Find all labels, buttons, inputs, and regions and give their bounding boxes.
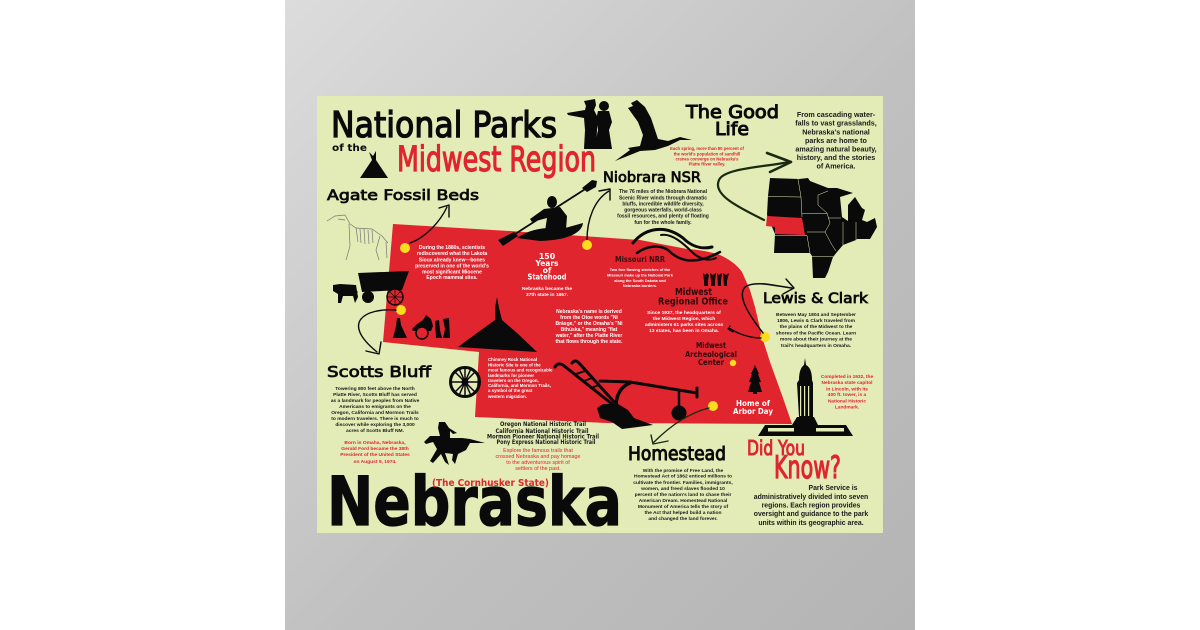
text: Niobrara: The 76 miles of the Niobrara National — [619, 189, 708, 195]
icon: plow — [555, 361, 697, 429]
text: Agate fossil: Epoch mammal sites. — [426, 275, 478, 281]
text: Agate fossil — [415, 245, 489, 281]
text: Archeological Center: Center — [698, 358, 724, 367]
text: Homestead — [633, 468, 733, 522]
text: Homestead: American Dream. Homestead National — [639, 498, 728, 504]
text: Midwest Regional Office — [645, 287, 728, 334]
text: Homestead: Monument of America tells the story of — [638, 504, 729, 510]
icon: fossil skeleton — [327, 215, 388, 260]
text: Midwest Regional Office: Midwest — [675, 287, 712, 298]
heading: Did You Know: Know? — [774, 450, 841, 486]
text: intro: Nebraska's national — [802, 128, 870, 136]
text: Gerald Ford: Born in Omaha, Nebraska, — [344, 440, 406, 446]
text: intro: parks are home to — [805, 136, 868, 145]
text: historic trails: Oregon National Historic Trail — [500, 420, 586, 428]
text: Chimney Rock: landmarks for pioneer — [488, 373, 534, 378]
heading: Agate Fossil Beds: Agate Fossil Beds — [327, 188, 479, 204]
text: Homestead: women, and freed slaves flooded 10 — [640, 486, 725, 492]
icon: Chimney Rock — [458, 297, 537, 352]
text: Gerald Ford: on August 9, 1974. — [353, 459, 397, 465]
arrow: Scotts Bluff — [359, 310, 396, 354]
text: intro: of America. — [817, 162, 855, 170]
midwest states map — [766, 178, 877, 278]
text: Lewis and Clark: the plains of the Midwest to the — [780, 324, 853, 330]
text: Chimney Rock: Chimney Rock National — [488, 357, 537, 362]
text: Did You Know: Park Service is — [808, 485, 858, 492]
icon: explorers pointing — [567, 99, 612, 149]
text: trails description: crossed Nebraska and pay homage — [495, 454, 581, 460]
text: Archeological Center: Archeological — [685, 350, 737, 359]
text: Missouri NRR: along the South Dakota and — [614, 278, 666, 283]
text: Home of Arbor Day: Arbor Day — [733, 407, 773, 416]
text: capitol fact: 400 ft. tower, is a — [828, 392, 867, 398]
text: Homestead: the Act that helped build a nation — [645, 510, 722, 516]
text: name origin — [555, 309, 623, 345]
text: historic trails — [487, 420, 599, 446]
text: crane fact: Each spring, more than 80 percent of — [670, 146, 744, 151]
text: Missouri NRR: Missouri NRR — [615, 255, 665, 264]
text: Did You Know: units within its geographic area. — [758, 520, 864, 527]
heading: The Good Life: The Good — [685, 102, 779, 123]
text: Gerald Ford: President of the United States — [340, 452, 410, 458]
text: Did You Know: oversight and guidance to the park — [754, 511, 868, 518]
text: crane fact: cranes converge on Nebraska's — [676, 156, 739, 162]
text: name origin: from the Otoe words "Ni — [560, 315, 618, 321]
heading: Lewis and Clark: Lewis & Clark — [763, 291, 869, 307]
arrow: Agate — [410, 205, 449, 243]
text: crane fact: Platte River valley. — [689, 162, 725, 166]
text: Niobrara: fossil resources, and plenty of floating — [617, 214, 709, 220]
text: Missouri NRR: Two free flowing stretches of the — [610, 267, 671, 272]
icon: kayaker — [498, 180, 597, 246]
text: intro: From cascading water- — [797, 110, 876, 119]
text: statehood: 37th state in 1867. — [526, 292, 569, 298]
icon: pony express rider — [424, 422, 485, 465]
text: Niobrara: bluffs, incredible wildlife diversity, — [622, 202, 704, 208]
heading: Did You Know — [747, 436, 841, 486]
text: historic trails: Pony Express National Historic Trail — [496, 438, 596, 446]
icon: Missouri river swirls — [633, 229, 720, 261]
text: trails description — [495, 448, 581, 472]
text: trails description: to the adventurous spirit of — [506, 460, 570, 466]
text: Niobrara: Scenic River winds through dramatic — [619, 196, 707, 202]
Nebraska state map — [383, 224, 792, 424]
title: of the — [332, 143, 367, 154]
text: Did You Know: regions. Each region provides — [762, 502, 861, 510]
icon: people silhouettes — [703, 273, 729, 286]
heading: Did You Know: Did You — [747, 436, 805, 460]
text: Chimney Rock: California, and Mormon Trails, — [488, 383, 551, 388]
text: intro: falls to vast grasslands, — [795, 118, 877, 128]
text: statehood: Statehood — [528, 272, 566, 282]
heading: Niobrara NSR: Niobrara NSR — [603, 170, 701, 186]
text: Did You Know — [754, 485, 868, 527]
text: historic trails: California National Historic Trail — [496, 427, 588, 435]
text: Midwest Regional Office: administers 61 parks sites across — [645, 322, 723, 328]
text: capitol fact: Nebraska state capitol — [822, 380, 872, 386]
arrow: Lewis and Clark — [728, 279, 794, 338]
icon: teepee — [360, 151, 388, 178]
text: Missouri NRR: Nebraska borders. — [623, 283, 657, 288]
text: Scotts Bluff: Towering 800 feet above the North — [335, 386, 415, 392]
text: statehood: 150 — [539, 252, 556, 261]
text: Gerald Ford — [340, 440, 410, 465]
text: Chimney Rock: Historic Site is one of the — [488, 362, 541, 368]
text: capitol fact — [821, 374, 873, 410]
text: intro: history, and the stories — [797, 153, 875, 162]
arrow: Homestead — [651, 408, 709, 444]
text: Scotts Bluff: as a landmark for peoples from Native — [331, 398, 420, 404]
text: capitol fact: in Lincoln, with its — [826, 386, 868, 392]
text: Lewis and Clark: Between May 1804 and September — [776, 312, 856, 318]
text: Lewis and Clark — [776, 312, 856, 349]
title — [331, 105, 596, 180]
text: Scotts Bluff: to modern travelers. There is much to — [331, 416, 419, 422]
text: Scotts Bluff: Oregon, California and Mormon Trails — [331, 410, 419, 416]
text: Did You Know: administratively divided into seven — [754, 494, 868, 501]
text: name origin: Bthúska," meaning "flat — [561, 327, 618, 333]
text: Scotts Bluff — [331, 386, 420, 434]
text: Home of Arbor Day — [733, 399, 773, 416]
text: historic trails: Mormon Pioneer National Historic Trail — [487, 432, 599, 440]
text: Midwest Regional Office: Since 1937, the headquarters of — [647, 310, 721, 316]
icon: pine tree — [748, 365, 762, 394]
text: Agate fossil: During the 1880s, scientists — [419, 245, 485, 251]
text: Scotts Bluff: acres of Scotts Bluff NM. — [346, 428, 405, 434]
text: Chimney Rock — [487, 357, 553, 399]
text: Agate fossil: rediscovered what the Lakota — [417, 251, 487, 257]
text: intro: amazing natural beauty, — [795, 144, 877, 154]
icon: state capitol — [758, 358, 853, 436]
text: Homestead: percent of the nation's land to chase their — [635, 492, 731, 498]
text: Niobrara — [617, 189, 709, 226]
text: statehood — [522, 252, 572, 298]
text: capitol fact: Landmark. — [835, 404, 859, 410]
text: Lewis and Clark: shores of the Pacific Ocean. Learn — [776, 330, 856, 336]
text: statehood: Nebraska became the — [522, 286, 572, 292]
text: Missouri NRR — [607, 255, 674, 288]
text: Agate fossil: preserved in one of the world's — [415, 264, 489, 270]
text: trails description: Explore the famous trails that — [503, 448, 573, 454]
heading: The Good Life: Life — [715, 119, 749, 140]
text: Archeological Center: Midwest — [696, 341, 726, 350]
text: intro — [795, 110, 877, 170]
text: Archeological Center — [685, 341, 737, 367]
icon: sandhill crane — [615, 100, 692, 161]
text: Scotts Bluff: discover while exploring the 3,000 — [335, 422, 415, 428]
text: Agate fossil: most significant Miocene — [422, 270, 482, 276]
arrow: good life to map — [718, 153, 791, 220]
text: Niobrara: gorgeous waterfalls, world-class — [624, 208, 702, 214]
text: Homestead: and changed the land forever. — [648, 516, 718, 522]
text: Chimney Rock: most famous and recognizable — [488, 368, 553, 372]
text: Scotts Bluff: Platte River, Scotts Bluff has served — [333, 392, 417, 398]
text: Lewis and Clark: more about their journey at the — [780, 336, 852, 342]
text: Chimney Rock: a symbol of the great — [488, 388, 533, 393]
text: Midwest Regional Office: the Midwest Region, which — [653, 316, 715, 322]
text: name origin: water," after the Platte River — [555, 333, 622, 339]
text: capitol fact: National Historic — [828, 398, 866, 404]
heading: Nebraska: Nebraska — [327, 463, 622, 542]
icon: ox and covered wagon — [333, 271, 409, 305]
text: Gerald Ford: Gerald Ford became the 38th — [341, 446, 409, 452]
text: Homestead: Homestead Act of 1862 enticed millions to — [634, 474, 732, 480]
text: crane fact — [670, 146, 744, 166]
text: Niobrara: fun for the whole family. — [634, 220, 692, 226]
text: Chimney Rock: travelers on the Oregon, — [488, 378, 539, 383]
title: National Parks — [331, 105, 557, 146]
text: Lewis and Clark: trail's headquarters in Omaha. — [781, 343, 852, 349]
text: Midwest Regional Office: Regional Office — [658, 296, 728, 308]
text: statehood: Years — [535, 259, 559, 268]
text: capitol fact: Completed in 1932, the — [821, 374, 873, 380]
text: crane fact: the world's population of sandhill — [674, 152, 740, 156]
icon: yellow map markers — [396, 240, 770, 411]
text: Midwest Regional Office: 13 states, has been in Omaha. — [649, 328, 720, 334]
text: name origin: Brásge," or the Omaha's "Ni — [555, 321, 623, 327]
heading: The Good Life — [685, 102, 779, 140]
icon: wagon wheel — [450, 367, 480, 397]
icon: stagecoach group — [393, 315, 450, 339]
text: trails description: settlers of the past. — [515, 466, 561, 472]
subtitle: The Cornhusker State: (The Cornhusker State) — [432, 478, 549, 489]
arrow: Niobrara — [587, 189, 610, 240]
text: Homestead: cultivate the frontier. Families, immigrants, — [633, 480, 733, 486]
heading: Scotts Bluff: Scotts Bluff — [327, 363, 432, 381]
title: Midwest Region — [397, 140, 596, 180]
text: Home of Arbor Day: Home of — [736, 399, 771, 408]
text: Lewis and Clark: 1806, Lewis & Clark traveled from — [777, 318, 856, 324]
text: name origin: Nebraska's name is derived — [556, 309, 622, 315]
heading: Homestead: Homestead — [628, 443, 726, 465]
text: Homestead: With the promise of Free Land, the — [643, 468, 723, 474]
text: statehood: of — [543, 266, 552, 275]
text: Missouri NRR: Missouri make up the National Park — [607, 272, 674, 278]
text: Chimney Rock: western migration. — [487, 394, 527, 399]
text: Scotts Bluff: Americans to emigrants on the — [339, 404, 411, 410]
text: name origin: that flows through the state. — [556, 339, 623, 345]
text: Agate fossil: Sioux already knew—bones — [419, 258, 485, 264]
